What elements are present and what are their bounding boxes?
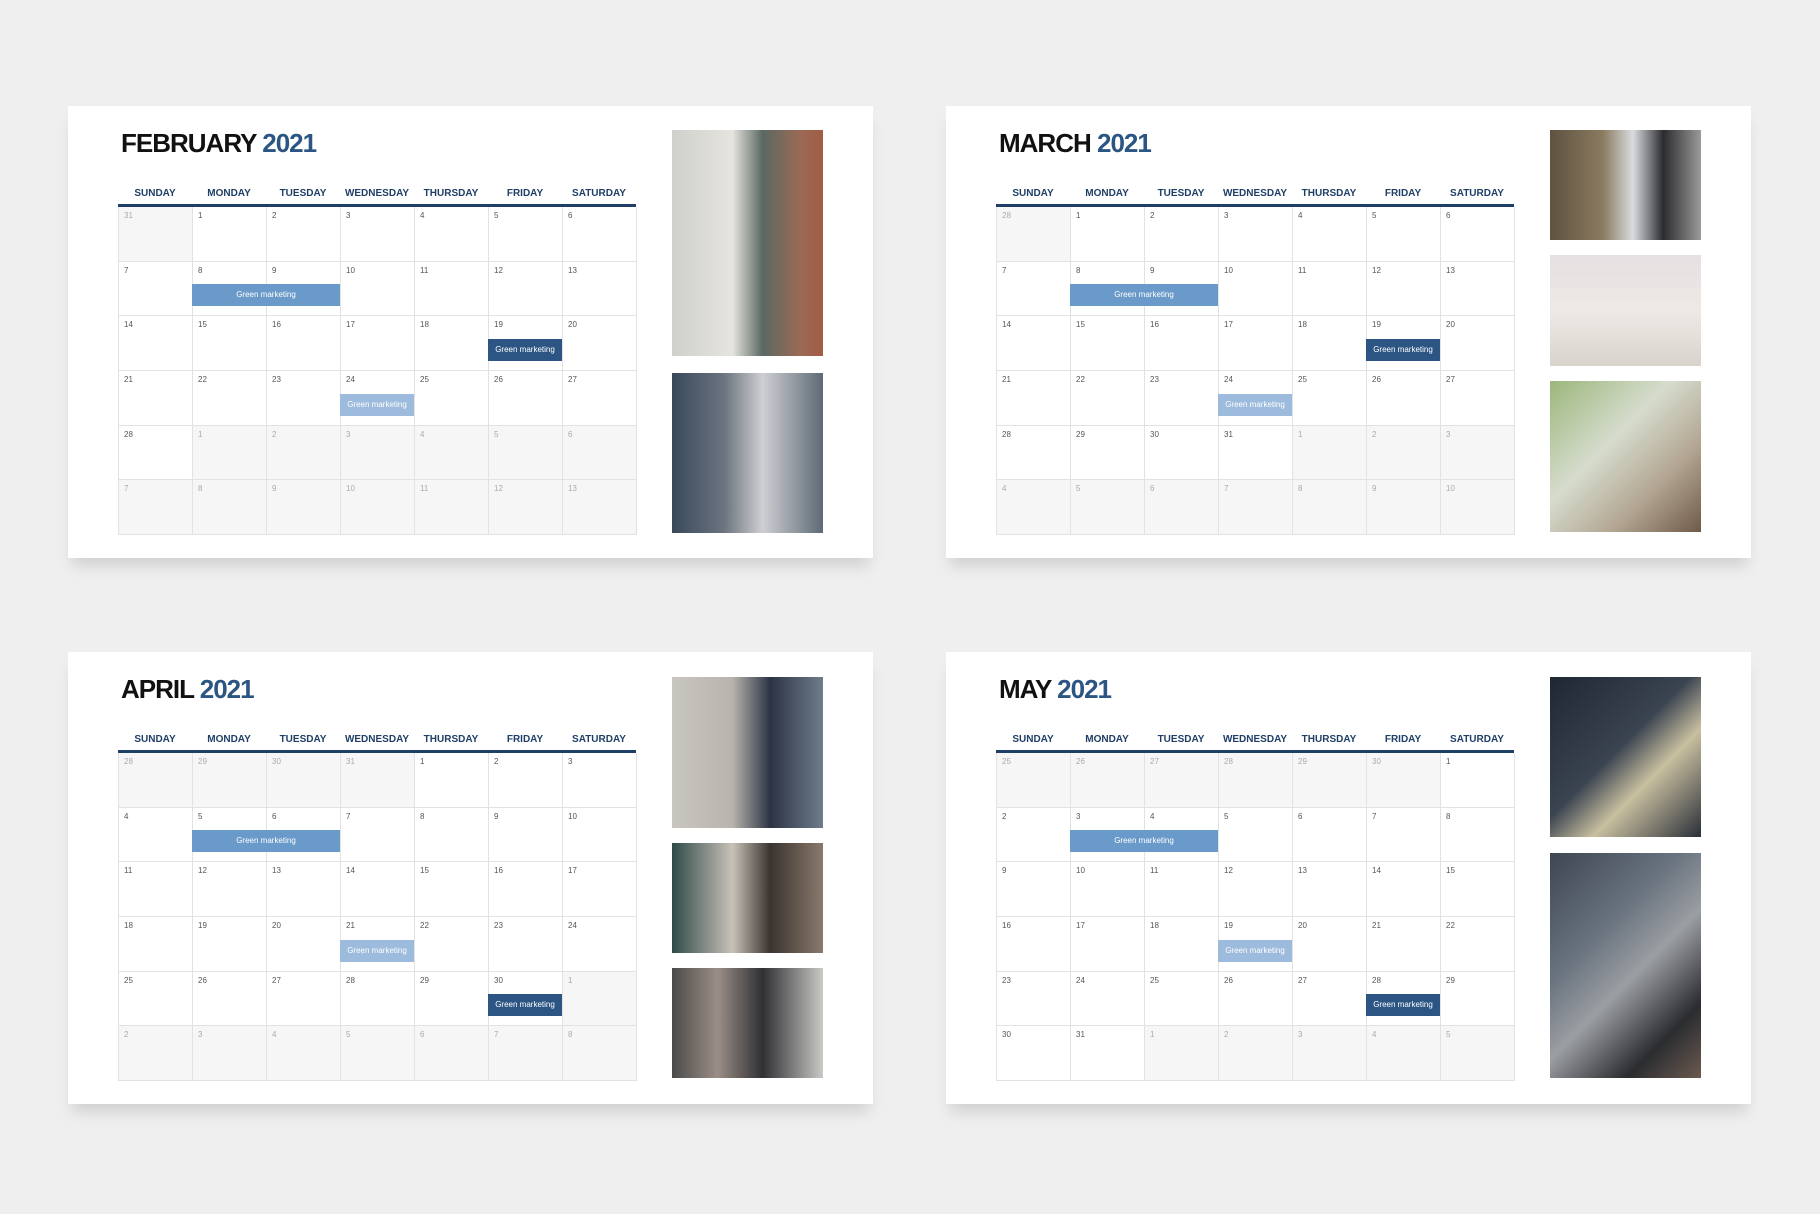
weekday header: FRIDAY [507, 734, 543, 745]
calendar grid: 5 [346, 1030, 350, 1039]
calendar grid: 4 [420, 211, 424, 220]
calendar grid: 12 [1224, 866, 1233, 875]
calendar grid: 8 [198, 484, 202, 493]
calendar grid: 1 [1150, 1030, 1154, 1039]
calendar grid: 23 [494, 921, 503, 930]
calendar grid: 24 [1076, 976, 1085, 985]
calendar grid [996, 207, 1514, 535]
photo: men smiling [672, 968, 823, 1078]
weekday header: SATURDAY [572, 188, 626, 199]
event bar [192, 830, 340, 852]
calendar grid: 13 [1298, 866, 1307, 875]
calendar grid: 9 [1150, 266, 1154, 275]
calendar grid: 13 [568, 484, 577, 493]
calendar grid: 8 [198, 266, 202, 275]
weekday header [118, 732, 636, 753]
panel: march [946, 106, 1751, 558]
calendar grid: 31 [1224, 430, 1233, 439]
calendar grid: 26 [198, 976, 207, 985]
calendar grid: 30 [494, 976, 503, 985]
calendar grid: 10 [346, 266, 355, 275]
calendar grid: 6 [1298, 812, 1302, 821]
event bar: Green marketing [495, 1000, 555, 1009]
calendar grid: 23 [1150, 375, 1159, 384]
event bar: Green marketing [1225, 946, 1285, 955]
calendar grid: 4 [420, 430, 424, 439]
calendar grid: 9 [494, 812, 498, 821]
calendar grid: 15 [420, 866, 429, 875]
photo: two colleagues [672, 843, 823, 953]
calendar grid: 24 [1224, 375, 1233, 384]
event bar [1218, 940, 1292, 962]
calendar grid: 18 [1298, 320, 1307, 329]
calendar grid: 11 [124, 866, 132, 875]
weekday header: FRIDAY [1385, 734, 1421, 745]
calendar grid: 7 [124, 266, 128, 275]
calendar grid: 29 [1446, 976, 1455, 985]
event bar: Green marketing [1225, 400, 1285, 409]
event bar: Green marketing [236, 290, 296, 299]
calendar grid: 17 [1224, 320, 1233, 329]
calendar grid: 21 [1002, 375, 1011, 384]
calendar grid: 7 [494, 1030, 498, 1039]
event bar: Green marketing [1114, 290, 1174, 299]
weekday header: TUESDAY [280, 734, 326, 745]
event bar: Green marketing [236, 836, 296, 845]
weekday header: THURSDAY [424, 188, 478, 199]
calendar grid: 25 [124, 976, 133, 985]
weekday header: SATURDAY [1450, 188, 1504, 199]
weekday header: THURSDAY [1302, 188, 1356, 199]
calendar grid: 6 [1150, 484, 1154, 493]
calendar grid: 16 [272, 320, 281, 329]
calendar grid: 7 [1002, 266, 1006, 275]
calendar grid: 14 [124, 320, 133, 329]
calendar grid: 25 [1150, 976, 1159, 985]
calendar grid: 30 [1002, 1030, 1011, 1039]
calendar grid: 1 [1446, 757, 1450, 766]
calendar grid: 30 [1372, 757, 1381, 766]
weekday header: SUNDAY [134, 188, 176, 199]
calendar grid: 21 [124, 375, 133, 384]
calendar grid: 27 [1446, 375, 1455, 384]
calendar grid: 7 [1372, 812, 1376, 821]
calendar grid: 20 [568, 320, 577, 329]
calendar grid: 2 [1150, 211, 1154, 220]
calendar grid: 5 [1076, 484, 1080, 493]
photo: typing on laptop [1550, 853, 1701, 1078]
event bar [340, 940, 414, 962]
calendar grid: 15 [198, 320, 207, 329]
weekday header: WEDNESDAY [1223, 188, 1287, 199]
calendar grid: 18 [124, 921, 133, 930]
title: MAY 2021 [999, 674, 1111, 704]
calendar grid: 29 [420, 976, 429, 985]
calendar grid: 8 [420, 812, 424, 821]
calendar grid: 5 [198, 812, 202, 821]
calendar grid: 22 [1446, 921, 1455, 930]
calendar grid: 1 [198, 211, 202, 220]
calendar grid: 20 [272, 921, 281, 930]
calendar grid: 11 [420, 266, 428, 275]
calendar grid: 12 [494, 484, 503, 493]
event bar [192, 284, 340, 306]
calendar grid: 10 [346, 484, 355, 493]
calendar grid: 4 [1372, 1030, 1376, 1039]
weekday header: THURSDAY [1302, 734, 1356, 745]
weekday header: SUNDAY [134, 734, 176, 745]
event bar [1070, 830, 1218, 852]
calendar grid: 31 [346, 757, 355, 766]
calendar grid: 4 [1298, 211, 1302, 220]
calendar grid [118, 753, 636, 1081]
photo: woman with glasses [672, 373, 823, 533]
weekday header: WEDNESDAY [345, 734, 409, 745]
calendar grid: 3 [1076, 812, 1080, 821]
calendar grid: 21 [346, 921, 355, 930]
calendar grid: 22 [1076, 375, 1085, 384]
weekday header: SUNDAY [1012, 734, 1054, 745]
calendar grid: 9 [1372, 484, 1376, 493]
calendar grid: 27 [1298, 976, 1307, 985]
calendar grid: 23 [1002, 976, 1011, 985]
panel: april [68, 652, 873, 1104]
calendar grid: 4 [1002, 484, 1006, 493]
calendar grid: 3 [1224, 211, 1228, 220]
calendar grid: 2 [1224, 1030, 1228, 1039]
calendar grid: 15 [1076, 320, 1085, 329]
calendar grid: 16 [494, 866, 503, 875]
event bar: Green marketing [1373, 1000, 1433, 1009]
calendar grid: 9 [1002, 866, 1006, 875]
calendar grid: 13 [1446, 266, 1455, 275]
calendar grid: 5 [1224, 812, 1228, 821]
calendar grid: 1 [568, 976, 572, 985]
event bar: Green marketing [347, 946, 407, 955]
calendar grid [996, 753, 1514, 1081]
weekday header: WEDNESDAY [1223, 734, 1287, 745]
event bar [1070, 284, 1218, 306]
calendar grid: 8 [1076, 266, 1080, 275]
calendar grid: 28 [346, 976, 355, 985]
calendar grid: 3 [1446, 430, 1450, 439]
calendar grid: 2 [272, 211, 276, 220]
event bar [1218, 394, 1292, 416]
calendar grid: 28 [1002, 211, 1011, 220]
calendar grid: 31 [1076, 1030, 1085, 1039]
weekday header: THURSDAY [424, 734, 478, 745]
title: MARCH 2021 [999, 128, 1151, 158]
calendar grid: 1 [420, 757, 424, 766]
calendar grid: 1 [1076, 211, 1080, 220]
calendar grid: 29 [198, 757, 207, 766]
calendar grid: 2 [124, 1030, 128, 1039]
calendar grid: 10 [1076, 866, 1085, 875]
calendar grid: 6 [568, 430, 572, 439]
calendar grid: 28 [1002, 430, 1011, 439]
calendar grid: 22 [198, 375, 207, 384]
calendar grid: 7 [124, 484, 128, 493]
weekday header: MONDAY [1085, 734, 1129, 745]
calendar grid: 30 [1150, 430, 1159, 439]
weekday header [996, 732, 1514, 753]
calendar grid: 12 [1372, 266, 1381, 275]
calendar grid: 2 [272, 430, 276, 439]
calendar grid: 5 [494, 430, 498, 439]
event bar [1366, 339, 1440, 361]
title: FEBRUARY 2021 [121, 128, 316, 158]
event bar: Green marketing [1373, 345, 1433, 354]
calendar grid: 5 [494, 211, 498, 220]
calendar grid: 19 [1224, 921, 1233, 930]
calendar grid: 15 [1446, 866, 1455, 875]
weekday header: SATURDAY [1450, 734, 1504, 745]
calendar grid: 10 [1446, 484, 1455, 493]
calendar grid: 6 [272, 812, 276, 821]
calendar grid: 3 [198, 1030, 202, 1039]
weekday header: SATURDAY [572, 734, 626, 745]
calendar grid: 20 [1298, 921, 1307, 930]
panel: february [68, 106, 873, 558]
calendar grid: 16 [1150, 320, 1159, 329]
calendar grid: 27 [568, 375, 577, 384]
weekday header: WEDNESDAY [345, 188, 409, 199]
calendar grid: 11 [420, 484, 428, 493]
weekday header [118, 186, 636, 207]
calendar grid: 28 [1224, 757, 1233, 766]
calendar grid: 27 [272, 976, 281, 985]
calendar grid: 23 [272, 375, 281, 384]
calendar grid: 22 [420, 921, 429, 930]
calendar grid: 3 [568, 757, 572, 766]
calendar grid: 8 [1298, 484, 1302, 493]
calendar grid: 26 [494, 375, 503, 384]
calendar grid: 12 [494, 266, 503, 275]
calendar grid: 27 [1150, 757, 1159, 766]
weekday header: TUESDAY [280, 188, 326, 199]
calendar grid: 6 [568, 211, 572, 220]
weekday header: MONDAY [207, 734, 251, 745]
calendar grid [118, 207, 636, 535]
panel: may [946, 652, 1751, 1104]
event bar: Green marketing [1114, 836, 1174, 845]
calendar grid: 14 [1372, 866, 1381, 875]
calendar grid: 1 [1298, 430, 1302, 439]
calendar grid: 25 [420, 375, 429, 384]
calendar grid: 19 [198, 921, 207, 930]
calendar grid: 13 [568, 266, 577, 275]
calendar grid: 3 [346, 211, 350, 220]
calendar grid: 20 [1446, 320, 1455, 329]
calendar grid: 14 [346, 866, 355, 875]
calendar grid: 13 [272, 866, 281, 875]
calendar grid: 25 [1298, 375, 1307, 384]
calendar grid: 16 [1002, 921, 1011, 930]
calendar grid: 29 [1298, 757, 1307, 766]
calendar grid: 12 [198, 866, 207, 875]
calendar grid: 18 [1150, 921, 1159, 930]
event bar: Green marketing [495, 345, 555, 354]
photo: woman with laptop [672, 677, 823, 828]
weekday header: TUESDAY [1158, 188, 1204, 199]
calendar grid: 24 [346, 375, 355, 384]
weekday header: SUNDAY [1012, 188, 1054, 199]
calendar grid: 11 [1150, 866, 1158, 875]
calendar grid: 11 [1298, 266, 1306, 275]
weekday header: MONDAY [207, 188, 251, 199]
calendar grid: 29 [1076, 430, 1085, 439]
event bar [1366, 994, 1440, 1016]
calendar grid: 1 [198, 430, 202, 439]
calendar grid: 14 [1002, 320, 1011, 329]
calendar grid: 3 [1298, 1030, 1302, 1039]
weekday header [996, 186, 1514, 207]
title: APRIL 2021 [121, 674, 254, 704]
calendar grid: 31 [124, 211, 133, 220]
event bar: Green marketing [347, 400, 407, 409]
calendar grid: 26 [1076, 757, 1085, 766]
photo: woman at computer [672, 130, 823, 356]
calendar grid: 5 [1372, 211, 1376, 220]
calendar grid: 21 [1372, 921, 1381, 930]
calendar grid: 19 [494, 320, 503, 329]
calendar grid: 30 [272, 757, 281, 766]
calendar grid: 28 [1372, 976, 1381, 985]
calendar grid: 2 [494, 757, 498, 766]
calendar grid: 28 [124, 430, 133, 439]
calendar grid: 6 [420, 1030, 424, 1039]
event bar [488, 994, 562, 1016]
calendar grid: 18 [420, 320, 429, 329]
calendar grid: 17 [568, 866, 577, 875]
weekday header: FRIDAY [1385, 188, 1421, 199]
event bar [488, 339, 562, 361]
calendar grid: 26 [1224, 976, 1233, 985]
calendar grid: 8 [568, 1030, 572, 1039]
calendar grid: 7 [1224, 484, 1228, 493]
calendar grid: 10 [568, 812, 577, 821]
calendar grid: 9 [272, 484, 276, 493]
calendar grid: 9 [272, 266, 276, 275]
weekday header: TUESDAY [1158, 734, 1204, 745]
event bar [340, 394, 414, 416]
photo: keyboard and mouse [1550, 255, 1701, 366]
calendar grid: 4 [1150, 812, 1154, 821]
calendar grid: 26 [1372, 375, 1381, 384]
calendar grid: 7 [346, 812, 350, 821]
calendar grid: 28 [124, 757, 133, 766]
calendar grid: 25 [1002, 757, 1011, 766]
weekday header: MONDAY [1085, 188, 1129, 199]
calendar grid: 2 [1002, 812, 1006, 821]
calendar grid: 6 [1446, 211, 1450, 220]
weekday header: FRIDAY [507, 188, 543, 199]
calendar grid: 10 [1224, 266, 1233, 275]
photo: hands with phone [1550, 677, 1701, 837]
calendar grid: 8 [1446, 812, 1450, 821]
calendar grid: 2 [1372, 430, 1376, 439]
photo: phone and laptop [1550, 381, 1701, 532]
calendar grid: 19 [1372, 320, 1381, 329]
calendar grid: 17 [346, 320, 355, 329]
calendar grid: 17 [1076, 921, 1085, 930]
calendar grid: 24 [568, 921, 577, 930]
calendar grid: 4 [124, 812, 128, 821]
photo: man at desk [1550, 130, 1701, 240]
calendar grid: 4 [272, 1030, 276, 1039]
calendar grid: 5 [1446, 1030, 1450, 1039]
calendar grid: 3 [346, 430, 350, 439]
